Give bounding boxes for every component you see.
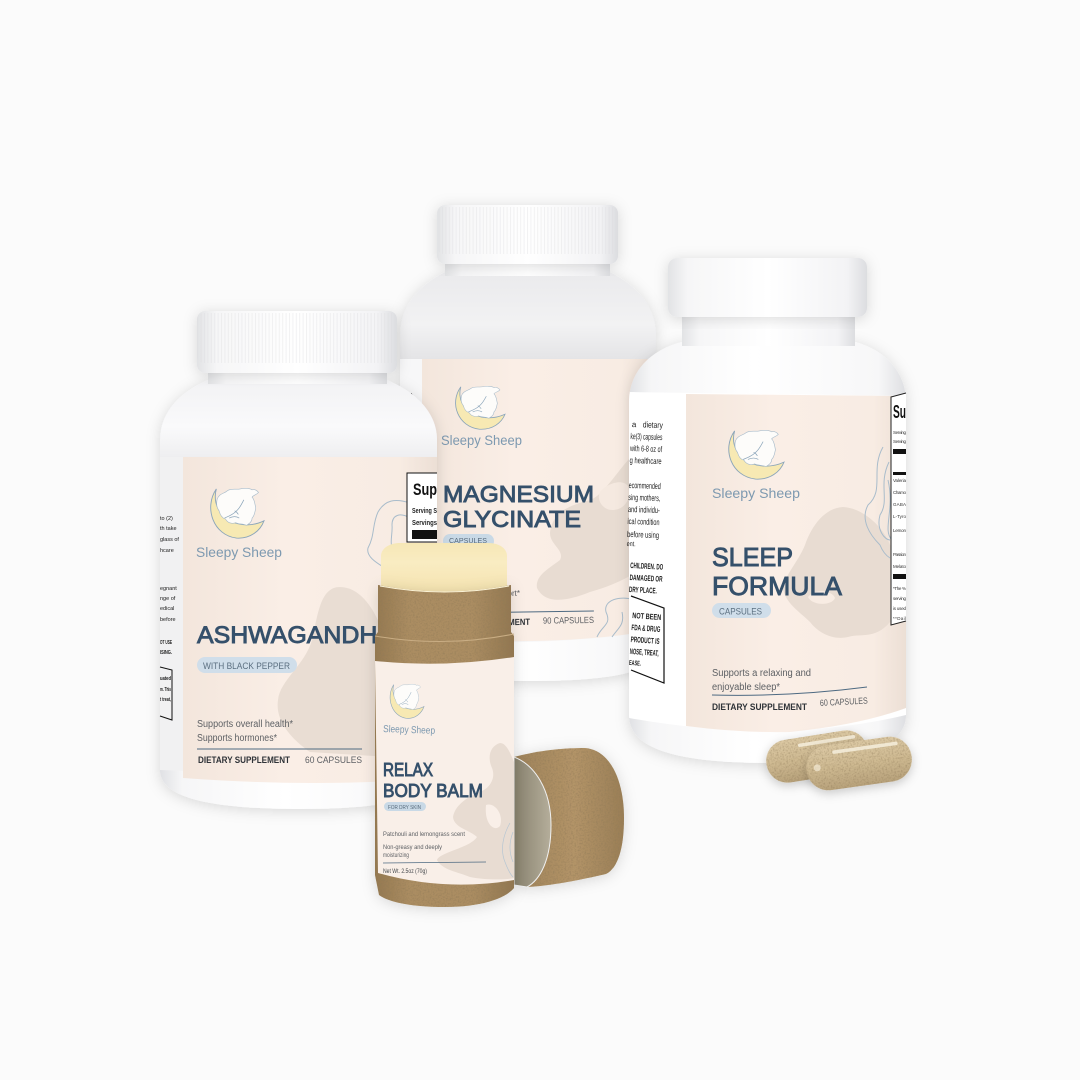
magnesium wave lines bbox=[596, 598, 629, 638]
balm description bbox=[383, 832, 465, 859]
sleep supplement facts bbox=[891, 393, 906, 625]
sleep supplement facts: Valeria bbox=[893, 478, 906, 483]
ashwagandha wave lines bbox=[368, 500, 410, 568]
magnesium shoulder shading bbox=[400, 272, 656, 360]
balm stick bbox=[375, 543, 514, 907]
balm title bbox=[383, 760, 483, 801]
balm cream top bbox=[381, 543, 507, 592]
bottle: ashwagandha bbox=[160, 311, 437, 809]
magnesium capsules pill: CAPSULES bbox=[449, 536, 487, 545]
magnesium blob bbox=[537, 460, 629, 600]
sleep blob bbox=[783, 507, 890, 638]
magnesium brand name: Sleepy Sheep bbox=[441, 433, 522, 448]
sleep title: FORMULA bbox=[712, 571, 843, 601]
bottle: magnesium glycinate bbox=[400, 205, 656, 681]
sleep supplement facts: serving bbox=[893, 596, 906, 601]
magnesium neck bbox=[445, 262, 610, 276]
sleep side directions: ecommended bbox=[629, 480, 661, 491]
balm pill: FOR DRY SKIN bbox=[388, 805, 421, 811]
ashwagandha peach label bbox=[183, 457, 437, 783]
balm pill bbox=[384, 802, 426, 811]
ashwagandha footer: DIETARY SUPPLEMENT bbox=[198, 755, 290, 765]
sleep peach label bbox=[686, 394, 906, 732]
balm kraft tube bbox=[375, 585, 514, 907]
sleep supplement facts: GABA bbox=[893, 502, 906, 507]
sleep footer bbox=[712, 687, 868, 712]
sleep side FDA box bbox=[629, 596, 664, 683]
sleep side directions: and individu- bbox=[628, 504, 660, 515]
balm description: Non-greasy and deeply bbox=[383, 845, 442, 851]
magnesium peach label bbox=[422, 359, 656, 641]
sleep side directions: sing mothers, bbox=[628, 492, 661, 503]
sleep labels bbox=[629, 392, 906, 732]
sleep cap bbox=[668, 258, 867, 317]
sleep supplement facts: Serving bbox=[893, 430, 906, 435]
sleep bottle body bbox=[629, 342, 906, 763]
sleep side FDA box: FDA & DRUG bbox=[631, 623, 661, 634]
sleep supplement facts: Chamo bbox=[893, 490, 906, 495]
sleep side directions: ical condition bbox=[627, 516, 660, 527]
magnesium title: MAGNESIUM bbox=[443, 481, 594, 507]
magnesium side text: of por bbox=[401, 403, 414, 409]
magnesium title: GLYCINATE bbox=[443, 506, 581, 532]
sleep logo bbox=[729, 430, 784, 479]
capsule pair bbox=[763, 727, 915, 793]
ashwagandha bottle body bbox=[160, 380, 437, 809]
sleep supplement facts: is used bbox=[893, 606, 906, 611]
balm blob highlight bbox=[486, 805, 501, 828]
magnesium support text: support* bbox=[490, 589, 520, 598]
sleep supplement facts: **Dail bbox=[893, 616, 906, 621]
ashwagandha supplement facts: Sup bbox=[413, 480, 437, 499]
sleep side FDA box: EASE. bbox=[629, 660, 641, 668]
sleep supplement facts: Melato bbox=[893, 564, 906, 569]
ashwagandha benefits: Supports overall health* bbox=[197, 719, 293, 730]
ashwagandha side warning box: uated bbox=[160, 676, 171, 682]
ashwagandha side text: hcare bbox=[160, 548, 174, 554]
ashwagandha side text: edical bbox=[160, 606, 174, 612]
sleep supplement facts: L-Tyro bbox=[893, 514, 906, 519]
magnesium logo bbox=[456, 386, 505, 429]
balm brand name: Sleepy Sheep bbox=[383, 724, 436, 737]
sleep side warnings: CHILDREN. DO bbox=[630, 561, 663, 572]
balm logo bbox=[390, 684, 424, 718]
ashwagandha side text: th take bbox=[160, 526, 177, 532]
sleep benefits bbox=[712, 668, 811, 693]
ashwagandha benefits: Supports hormones* bbox=[197, 733, 277, 744]
sleep side directions: g healthcare bbox=[629, 455, 662, 466]
sleep side warnings bbox=[629, 561, 664, 596]
sleep side directions: ent. bbox=[627, 541, 636, 548]
back capsule bbox=[763, 727, 871, 786]
ashwagandha side text: before bbox=[160, 617, 176, 623]
sleep side directions: a bbox=[632, 420, 637, 429]
ashwagandha supplement facts bbox=[407, 473, 437, 542]
balm collar seam bbox=[375, 634, 514, 642]
ashwagandha side text: glass of bbox=[160, 537, 179, 543]
lid opening bbox=[514, 757, 551, 887]
sleep capsules pill: CAPSULES bbox=[719, 606, 762, 616]
sleep supplement facts: *The % bbox=[893, 586, 906, 591]
sleep side FDA box: NOT BEEN bbox=[632, 611, 662, 622]
ashwagandha side warning box: t treat, bbox=[160, 697, 171, 703]
magnesium side text: to (4) bbox=[401, 393, 413, 399]
sleep footer: 60 CAPSULES bbox=[820, 695, 868, 708]
balm title: RELAX bbox=[383, 760, 433, 780]
balm cream rim bbox=[380, 586, 509, 592]
sleep side directions: ke(3) capsules bbox=[630, 431, 663, 442]
balm title: BODY BALM bbox=[383, 781, 483, 801]
sleep neck bbox=[682, 312, 855, 346]
sleep side directions: before using bbox=[627, 529, 659, 540]
balm description: Patchouli and lemongrass scent bbox=[383, 832, 465, 838]
ashwagandha footer bbox=[197, 749, 362, 765]
magnesium footer bbox=[443, 611, 594, 628]
ashwagandha pill: WITH BLACK PEPPER bbox=[203, 661, 290, 671]
balm footer bbox=[383, 862, 486, 875]
sleep wave lines bbox=[865, 447, 892, 558]
magnesium blob highlight bbox=[599, 482, 629, 510]
sleep side directions: dietary bbox=[643, 419, 664, 430]
sleep capsules pill bbox=[712, 603, 771, 618]
balm label bbox=[375, 657, 514, 885]
ashwagandha neck bbox=[208, 370, 387, 384]
ashwagandha logo bbox=[211, 488, 264, 538]
open balm lid bbox=[514, 748, 624, 887]
sleep side FDA box: NOSE, TREAT, bbox=[629, 647, 659, 658]
ashwagandha side warning box bbox=[160, 667, 172, 720]
bottle: sleep formula bbox=[626, 258, 906, 763]
sleep benefits: Supports a relaxing and bbox=[712, 668, 811, 679]
sleep supplement facts: Su bbox=[893, 402, 906, 422]
ashwagandha title: ASHWAGANDHA bbox=[197, 622, 394, 649]
ashwagandha benefits bbox=[197, 719, 293, 744]
lid outer kraft bbox=[514, 748, 624, 887]
sleep side warnings: DAMAGED OR bbox=[629, 573, 663, 584]
magnesium cap bbox=[437, 205, 618, 264]
magnesium capsules pill bbox=[443, 534, 494, 548]
ashwagandha side text bbox=[160, 516, 179, 656]
sleep supplement facts: Lemon bbox=[893, 528, 906, 533]
ashwagandha cap bbox=[197, 311, 397, 373]
magnesium footer: 90 CAPSULES bbox=[543, 615, 594, 626]
sleep supplement facts: Serving bbox=[893, 439, 906, 444]
ashwagandha brand name: Sleepy Sheep bbox=[196, 544, 282, 560]
balm wave lines bbox=[503, 823, 513, 877]
sleep footer: DIETARY SUPPLEMENT bbox=[712, 702, 807, 712]
magnesium title bbox=[443, 481, 594, 532]
ashwagandha side text: to (2) bbox=[160, 516, 173, 522]
ashwagandha shoulder shading bbox=[160, 380, 437, 458]
balm description: moisturizing bbox=[383, 853, 409, 859]
balm blob bbox=[437, 743, 514, 879]
ashwagandha side text: OT USE bbox=[160, 640, 172, 646]
ashwagandha side text: egnant bbox=[160, 586, 177, 592]
sleep title bbox=[712, 542, 843, 601]
sleep supplement facts: Passion bbox=[893, 552, 906, 557]
ashwagandha supplement facts: Serving S bbox=[412, 506, 437, 515]
magnesium footer: DIETARY SUPPLEMENT bbox=[443, 617, 531, 628]
ashwagandha blob bbox=[278, 587, 378, 756]
ashwagandha footer: 60 CAPSULES bbox=[305, 755, 362, 765]
sleep side directions bbox=[626, 419, 664, 549]
front capsule bbox=[803, 734, 915, 793]
magnesium side text bbox=[401, 393, 414, 409]
sleep side warnings: DRY PLACE. bbox=[629, 585, 657, 595]
sleep blob highlight bbox=[808, 591, 835, 604]
ashwagandha pill bbox=[197, 657, 297, 673]
sleep benefits: enjoyable sleep* bbox=[712, 682, 780, 693]
balm footer: Net Wt. 2.5oz (70g) bbox=[383, 869, 427, 875]
sleep side directions: with 6-8 oz of bbox=[629, 443, 663, 454]
ashwagandha labels bbox=[160, 457, 437, 783]
sleep brand name: Sleepy Sheep bbox=[712, 485, 800, 501]
magnesium bottle body bbox=[400, 272, 656, 681]
magnesium white label bbox=[400, 359, 656, 643]
sleep side FDA box: PRODUCT IS bbox=[630, 635, 660, 646]
ashwagandha supplement facts: Servings bbox=[412, 518, 437, 527]
ashwagandha side text: ISING. bbox=[160, 650, 172, 656]
sleep title: SLEEP bbox=[712, 542, 793, 572]
ashwagandha side text: nge of bbox=[160, 596, 176, 602]
ashwagandha side warning box: m. This bbox=[160, 687, 171, 693]
